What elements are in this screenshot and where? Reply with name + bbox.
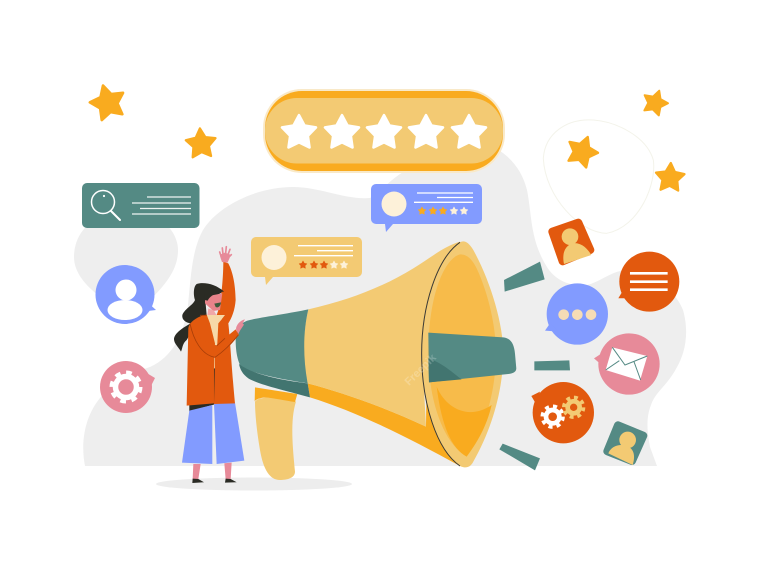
search card: [82, 183, 200, 228]
megaphone cone: [304, 242, 460, 466]
trousers: [182, 403, 244, 464]
orange coat: [187, 315, 239, 406]
icon: settings bubble: [100, 361, 155, 413]
icon: gears bubble: [531, 382, 594, 443]
megaphone nozzle: [428, 333, 516, 382]
megaphone rear section: [236, 309, 310, 397]
hair: [174, 283, 223, 352]
dark top: [189, 368, 223, 411]
star: right middle: [563, 132, 602, 170]
five star rating panel: [263, 89, 505, 173]
megaphone: [236, 241, 516, 480]
raised hand: [220, 247, 231, 263]
teal shard: upper: [504, 262, 545, 292]
touching hand: [236, 319, 245, 334]
icon: mail bubble: [594, 333, 660, 395]
star: right upper: [640, 87, 671, 117]
megaphone handle: [255, 387, 297, 480]
background blob: upper left grey shape: [74, 215, 178, 310]
teal shard: middle: [534, 360, 570, 370]
background blob: main grey shape: [83, 144, 686, 466]
ground shadow: [156, 478, 352, 490]
face: [204, 287, 224, 315]
raised arm: [217, 262, 236, 323]
review bubble: yellow: [251, 237, 362, 285]
review bubble: blue: [371, 184, 482, 232]
rating stars: [282, 115, 486, 147]
star: top left large: [86, 81, 129, 122]
person: [174, 247, 245, 483]
icon: blue chat bubble: [545, 283, 608, 345]
shirt: [207, 315, 225, 368]
megaphone bell: [422, 241, 503, 467]
icon: orange user tile: [552, 223, 591, 264]
decorative outline blob: [543, 120, 654, 233]
teal shard: lower: [499, 444, 540, 470]
legs and shoes: [192, 463, 237, 483]
watermark text: Freepik: [403, 351, 439, 388]
icon: orange message bubble: [618, 252, 679, 312]
star: top left small: [185, 127, 217, 158]
star: right lower: [655, 162, 685, 191]
icon: user bubble: [96, 265, 156, 324]
icon: teal user tile: [607, 425, 643, 465]
